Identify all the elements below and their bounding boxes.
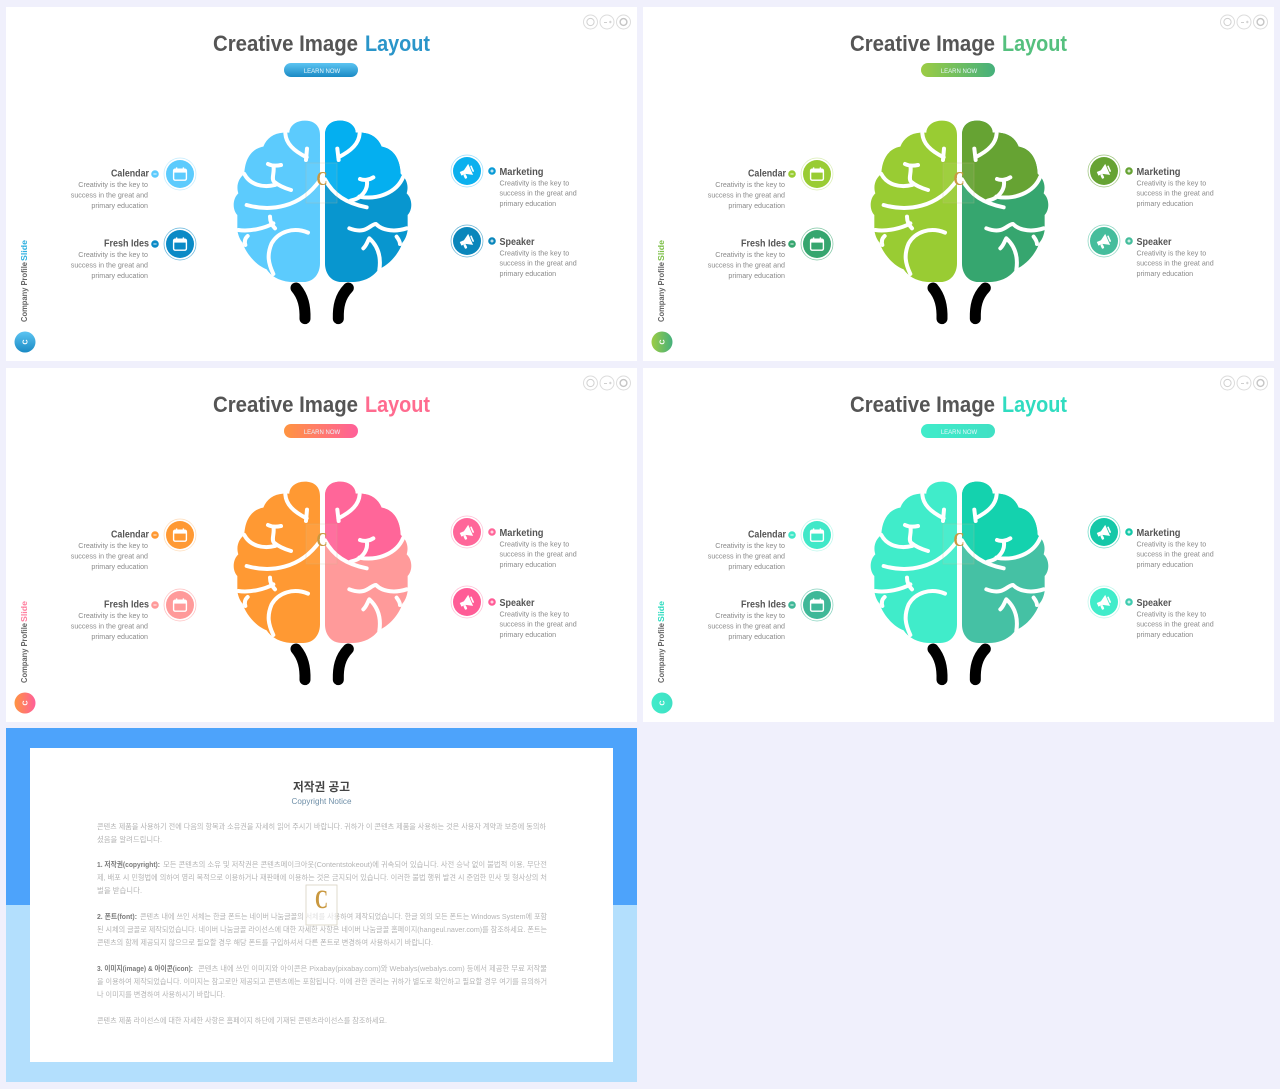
logo badge bbox=[14, 332, 36, 352]
callout: calendar: Creativity is the key to bbox=[78, 542, 148, 550]
callout: speaker bbox=[1088, 225, 1214, 278]
notice section 1 bbox=[97, 860, 547, 895]
callout: calendar: Calendar bbox=[111, 530, 149, 541]
notice intro bbox=[97, 822, 546, 844]
callout: calendar: Calendar bbox=[111, 169, 149, 180]
callout: speaker: Speaker bbox=[500, 598, 535, 609]
callout: fresh ides: success in the great and bbox=[708, 262, 785, 270]
callout: calendar: Calendar bbox=[748, 169, 786, 180]
callout: calendar: Creativity is the key to bbox=[78, 181, 148, 189]
panel: orange and pink slide bbox=[6, 368, 637, 722]
brain illustration bbox=[871, 121, 1048, 319]
callout: fresh ides bbox=[71, 589, 196, 641]
notice section 1: 제, 배포 시 민형법에 의하여 영리 목적으로 이용하거나 재판매에 이용하는 것은 금지되어 있습니다. 이러한 불법 행위 발견 시 준엄한 민사 및 형사상의 처 bbox=[97, 873, 547, 882]
callout: fresh ides: primary education bbox=[91, 633, 148, 641]
callout: marketing: primary education bbox=[500, 561, 556, 569]
notice section 2: 2. 폰트(font): bbox=[97, 912, 137, 921]
title: Creative Image bbox=[850, 31, 995, 56]
watermark bbox=[943, 524, 974, 564]
callout: calendar: success in the great and bbox=[708, 552, 785, 560]
social icons bbox=[1220, 376, 1268, 390]
panel: copyright notice bbox=[6, 728, 637, 1082]
callout: marketing: Creativity is the key to bbox=[500, 180, 569, 188]
sidebar label: Company Profile bbox=[19, 623, 29, 683]
callout: marketing: primary education bbox=[500, 200, 556, 208]
callout: marketing bbox=[451, 516, 577, 569]
notice section 3: 을 이용하여 제작되었습니다. 이미지는 참고로만 제공되고 콘텐츠에는 포함됩니다. 이에 관한 권리는 귀하가 별도로 확인하고 필요할 경우 여기를 유의하거 bbox=[97, 977, 547, 986]
sidebar label: Company Profile bbox=[656, 262, 666, 322]
sidebar label: Company Profile bbox=[19, 262, 29, 322]
social icons bbox=[584, 15, 630, 29]
logo badge: C bbox=[660, 339, 666, 345]
watermark bbox=[306, 524, 337, 564]
notice footer: 콘텐츠 제품 라이선스에 대한 자세한 사항은 홈페이지 하단에 기재된 콘텐츠라이선스를 참조하세요. bbox=[97, 1016, 387, 1025]
callout: speaker bbox=[451, 225, 577, 278]
notice section 3 bbox=[97, 964, 547, 999]
callout: calendar bbox=[708, 519, 833, 571]
callout: speaker: primary education bbox=[500, 270, 556, 278]
logo badge: C bbox=[22, 700, 30, 706]
sidebar label: Slide bbox=[656, 240, 666, 261]
callout: calendar bbox=[708, 158, 833, 210]
button: learn now: LEARN NOW bbox=[941, 430, 978, 436]
callout: fresh ides: primary education bbox=[91, 272, 148, 280]
callout: marketing: Marketing bbox=[1136, 528, 1180, 539]
logo badge: C bbox=[660, 700, 666, 706]
sidebar label: Slide bbox=[19, 240, 29, 261]
sidebar label: Slide bbox=[19, 601, 29, 622]
callout: calendar: primary education bbox=[91, 202, 148, 210]
callout: marketing: Creativity is the key to bbox=[1136, 540, 1206, 548]
callout: speaker: success in the great and bbox=[1136, 260, 1214, 268]
callout: fresh ides: success in the great and bbox=[71, 622, 148, 630]
watermark bbox=[306, 163, 337, 203]
social icons bbox=[1220, 15, 1268, 29]
logo badge: C bbox=[22, 339, 30, 345]
callout: speaker: Speaker bbox=[1136, 598, 1172, 609]
panel: teal slide bbox=[643, 368, 1274, 722]
callout: calendar: Creativity is the key to bbox=[715, 542, 785, 550]
callout: fresh ides: Fresh Ides bbox=[741, 600, 786, 611]
callout: speaker bbox=[451, 586, 577, 639]
callout: marketing: success in the great and bbox=[1136, 550, 1214, 558]
callout: calendar: primary education bbox=[91, 563, 148, 571]
logo badge bbox=[14, 692, 36, 714]
social icons bbox=[584, 376, 630, 390]
notice section 2 bbox=[97, 912, 547, 947]
brain illustration bbox=[871, 482, 1048, 680]
sidebar label: Company Profile bbox=[656, 623, 666, 683]
callout: fresh ides bbox=[708, 228, 833, 280]
callout: fresh ides: primary education bbox=[728, 633, 785, 641]
callout: marketing: Creativity is the key to bbox=[1136, 180, 1206, 188]
brain illustration bbox=[234, 482, 411, 680]
notice section 3: 3. 이미지(image) & 아이콘(icon): bbox=[97, 964, 193, 973]
logo badge bbox=[652, 692, 672, 714]
watermark: C bbox=[954, 168, 964, 190]
button: learn now: LEARN NOW bbox=[304, 430, 341, 436]
watermark bbox=[306, 885, 337, 925]
callout: fresh ides: Fresh Ides bbox=[104, 600, 149, 611]
title: Layout bbox=[1002, 392, 1068, 417]
callout: marketing: primary education bbox=[1136, 561, 1193, 569]
notice section 2: 콘텐츠 내에 쓰인 서체는 한글 폰트는 네이버 나눔글꼴의 서체를 사용하여 제작되었습니다. 한글 외의 모든 폰트는 Windows System에 포함 bbox=[140, 912, 547, 921]
callout: fresh ides: Creativity is the key to bbox=[78, 612, 148, 620]
watermark: C bbox=[315, 885, 328, 914]
callout: marketing: success in the great and bbox=[500, 550, 577, 558]
callout: fresh ides bbox=[71, 228, 196, 280]
callout: speaker: Creativity is the key to bbox=[1136, 250, 1206, 258]
callout: fresh ides: success in the great and bbox=[708, 622, 785, 630]
notice intro: 콘텐츠 제품을 사용하기 전에 다음의 항목과 소유권을 자세히 읽어 주시기 바랍니다. 귀하가 이 콘텐츠 제품을 사용하는 것은 사용자 계약과 보증에 동의하 bbox=[97, 822, 546, 831]
notice section 1: 모든 콘텐츠의 소유 및 저작권은 콘텐츠메이크아웃(Contentstokeout)에 귀속되어 있습니다. 사전 승낙 없이 불법적 이용, 무단전 bbox=[163, 860, 547, 869]
callout: speaker: success in the great and bbox=[500, 260, 577, 268]
title: Creative Image bbox=[213, 31, 358, 56]
callout: speaker: success in the great and bbox=[1136, 620, 1214, 628]
callout: fresh ides: Creativity is the key to bbox=[715, 251, 785, 259]
notice section 3: 콘텐츠 내에 쓰인 이미지와 아이콘은 Pixabay(pixabay.com)와 Webalys(webalys.com) 등에서 제공한 무료 저작물 bbox=[198, 964, 547, 973]
watermark: C bbox=[316, 168, 328, 190]
button: learn now: LEARN NOW bbox=[941, 69, 978, 75]
watermark: C bbox=[954, 529, 964, 551]
callout: marketing: Creativity is the key to bbox=[500, 540, 569, 548]
callout: fresh ides: success in the great and bbox=[71, 262, 148, 270]
callout: speaker: Speaker bbox=[1136, 237, 1172, 248]
callout: marketing: success in the great and bbox=[500, 190, 577, 198]
panel: blue slide bbox=[6, 7, 637, 361]
title: Layout bbox=[365, 31, 431, 56]
callout: calendar: success in the great and bbox=[71, 192, 148, 200]
callout: marketing: primary education bbox=[1136, 200, 1193, 208]
callout: calendar: success in the great and bbox=[71, 552, 148, 560]
callout: fresh ides: Fresh Ides bbox=[741, 239, 786, 250]
callout: marketing: Marketing bbox=[1136, 167, 1180, 178]
panel: green slide bbox=[643, 7, 1274, 361]
callout: marketing: Marketing bbox=[500, 528, 544, 539]
callout: fresh ides: Creativity is the key to bbox=[78, 251, 148, 259]
callout: marketing bbox=[1088, 516, 1214, 569]
watermark: C bbox=[316, 529, 328, 551]
notice intro: 셨음을 알려드립니다. bbox=[97, 835, 162, 844]
callout: speaker: Creativity is the key to bbox=[500, 250, 569, 258]
callout: speaker: Speaker bbox=[500, 237, 535, 248]
watermark bbox=[943, 163, 974, 203]
callout: fresh ides: Creativity is the key to bbox=[715, 612, 785, 620]
notice section 3: 나 이미지를 변경하여 사용하시기 바랍니다. bbox=[97, 990, 225, 999]
callout: marketing bbox=[1088, 155, 1214, 208]
callout: fresh ides: primary education bbox=[728, 272, 785, 280]
callout: fresh ides bbox=[708, 589, 833, 641]
callout: speaker: primary education bbox=[1136, 270, 1193, 278]
callout: marketing: success in the great and bbox=[1136, 190, 1214, 198]
callout: speaker: success in the great and bbox=[500, 620, 577, 628]
title: Layout bbox=[365, 392, 431, 417]
callout: calendar: primary education bbox=[728, 202, 785, 210]
notice section 2: 콘텐츠의 함께 제공되지 않으므로 필요할 경우 해당 폰트를 구입하셔서 다른 폰트로 변경하여 사용하시기 바랍니다. bbox=[97, 938, 433, 947]
title: Creative Image bbox=[850, 392, 995, 417]
callout: speaker: primary education bbox=[1136, 631, 1193, 639]
button: learn now bbox=[284, 424, 358, 438]
callout: marketing bbox=[451, 155, 577, 208]
callout: speaker: primary education bbox=[500, 631, 556, 639]
notice section 1: 벌을 받습니다. bbox=[97, 886, 142, 895]
button: learn now bbox=[284, 63, 358, 77]
notice subheading: Copyright Notice bbox=[292, 796, 352, 806]
callout: calendar: success in the great and bbox=[708, 192, 785, 200]
callout: calendar bbox=[71, 158, 196, 210]
notice heading: 저작권 공고 bbox=[293, 779, 350, 794]
callout: calendar: Calendar bbox=[748, 530, 786, 541]
title: Layout bbox=[1002, 31, 1068, 56]
logo badge bbox=[652, 332, 672, 352]
title: Creative Image bbox=[213, 392, 358, 417]
callout: speaker bbox=[1088, 586, 1214, 639]
callout: fresh ides: Fresh Ides bbox=[104, 239, 149, 250]
callout: calendar: Creativity is the key to bbox=[715, 181, 785, 189]
callout: calendar: primary education bbox=[728, 563, 785, 571]
notice section 2: 된 시체의 글꼴로 제작되었습니다. 네이버 나눔글꼴 라이선스에 대한 자세한 사항은 네이버 나눔글꼴 홈페이지(hangeul.naver.com)를 참조하세요. 폰트는 bbox=[97, 925, 547, 934]
button: learn now bbox=[921, 63, 995, 77]
button: learn now: LEARN NOW bbox=[304, 69, 341, 75]
callout: speaker: Creativity is the key to bbox=[500, 610, 569, 618]
sidebar label: Slide bbox=[656, 601, 666, 622]
callout: calendar bbox=[71, 519, 196, 571]
callout: marketing: Marketing bbox=[500, 167, 544, 178]
brain illustration bbox=[234, 121, 411, 319]
button: learn now bbox=[921, 424, 995, 438]
notice section 1: 1. 저작권(copyright): bbox=[97, 860, 160, 869]
callout: speaker: Creativity is the key to bbox=[1136, 610, 1206, 618]
